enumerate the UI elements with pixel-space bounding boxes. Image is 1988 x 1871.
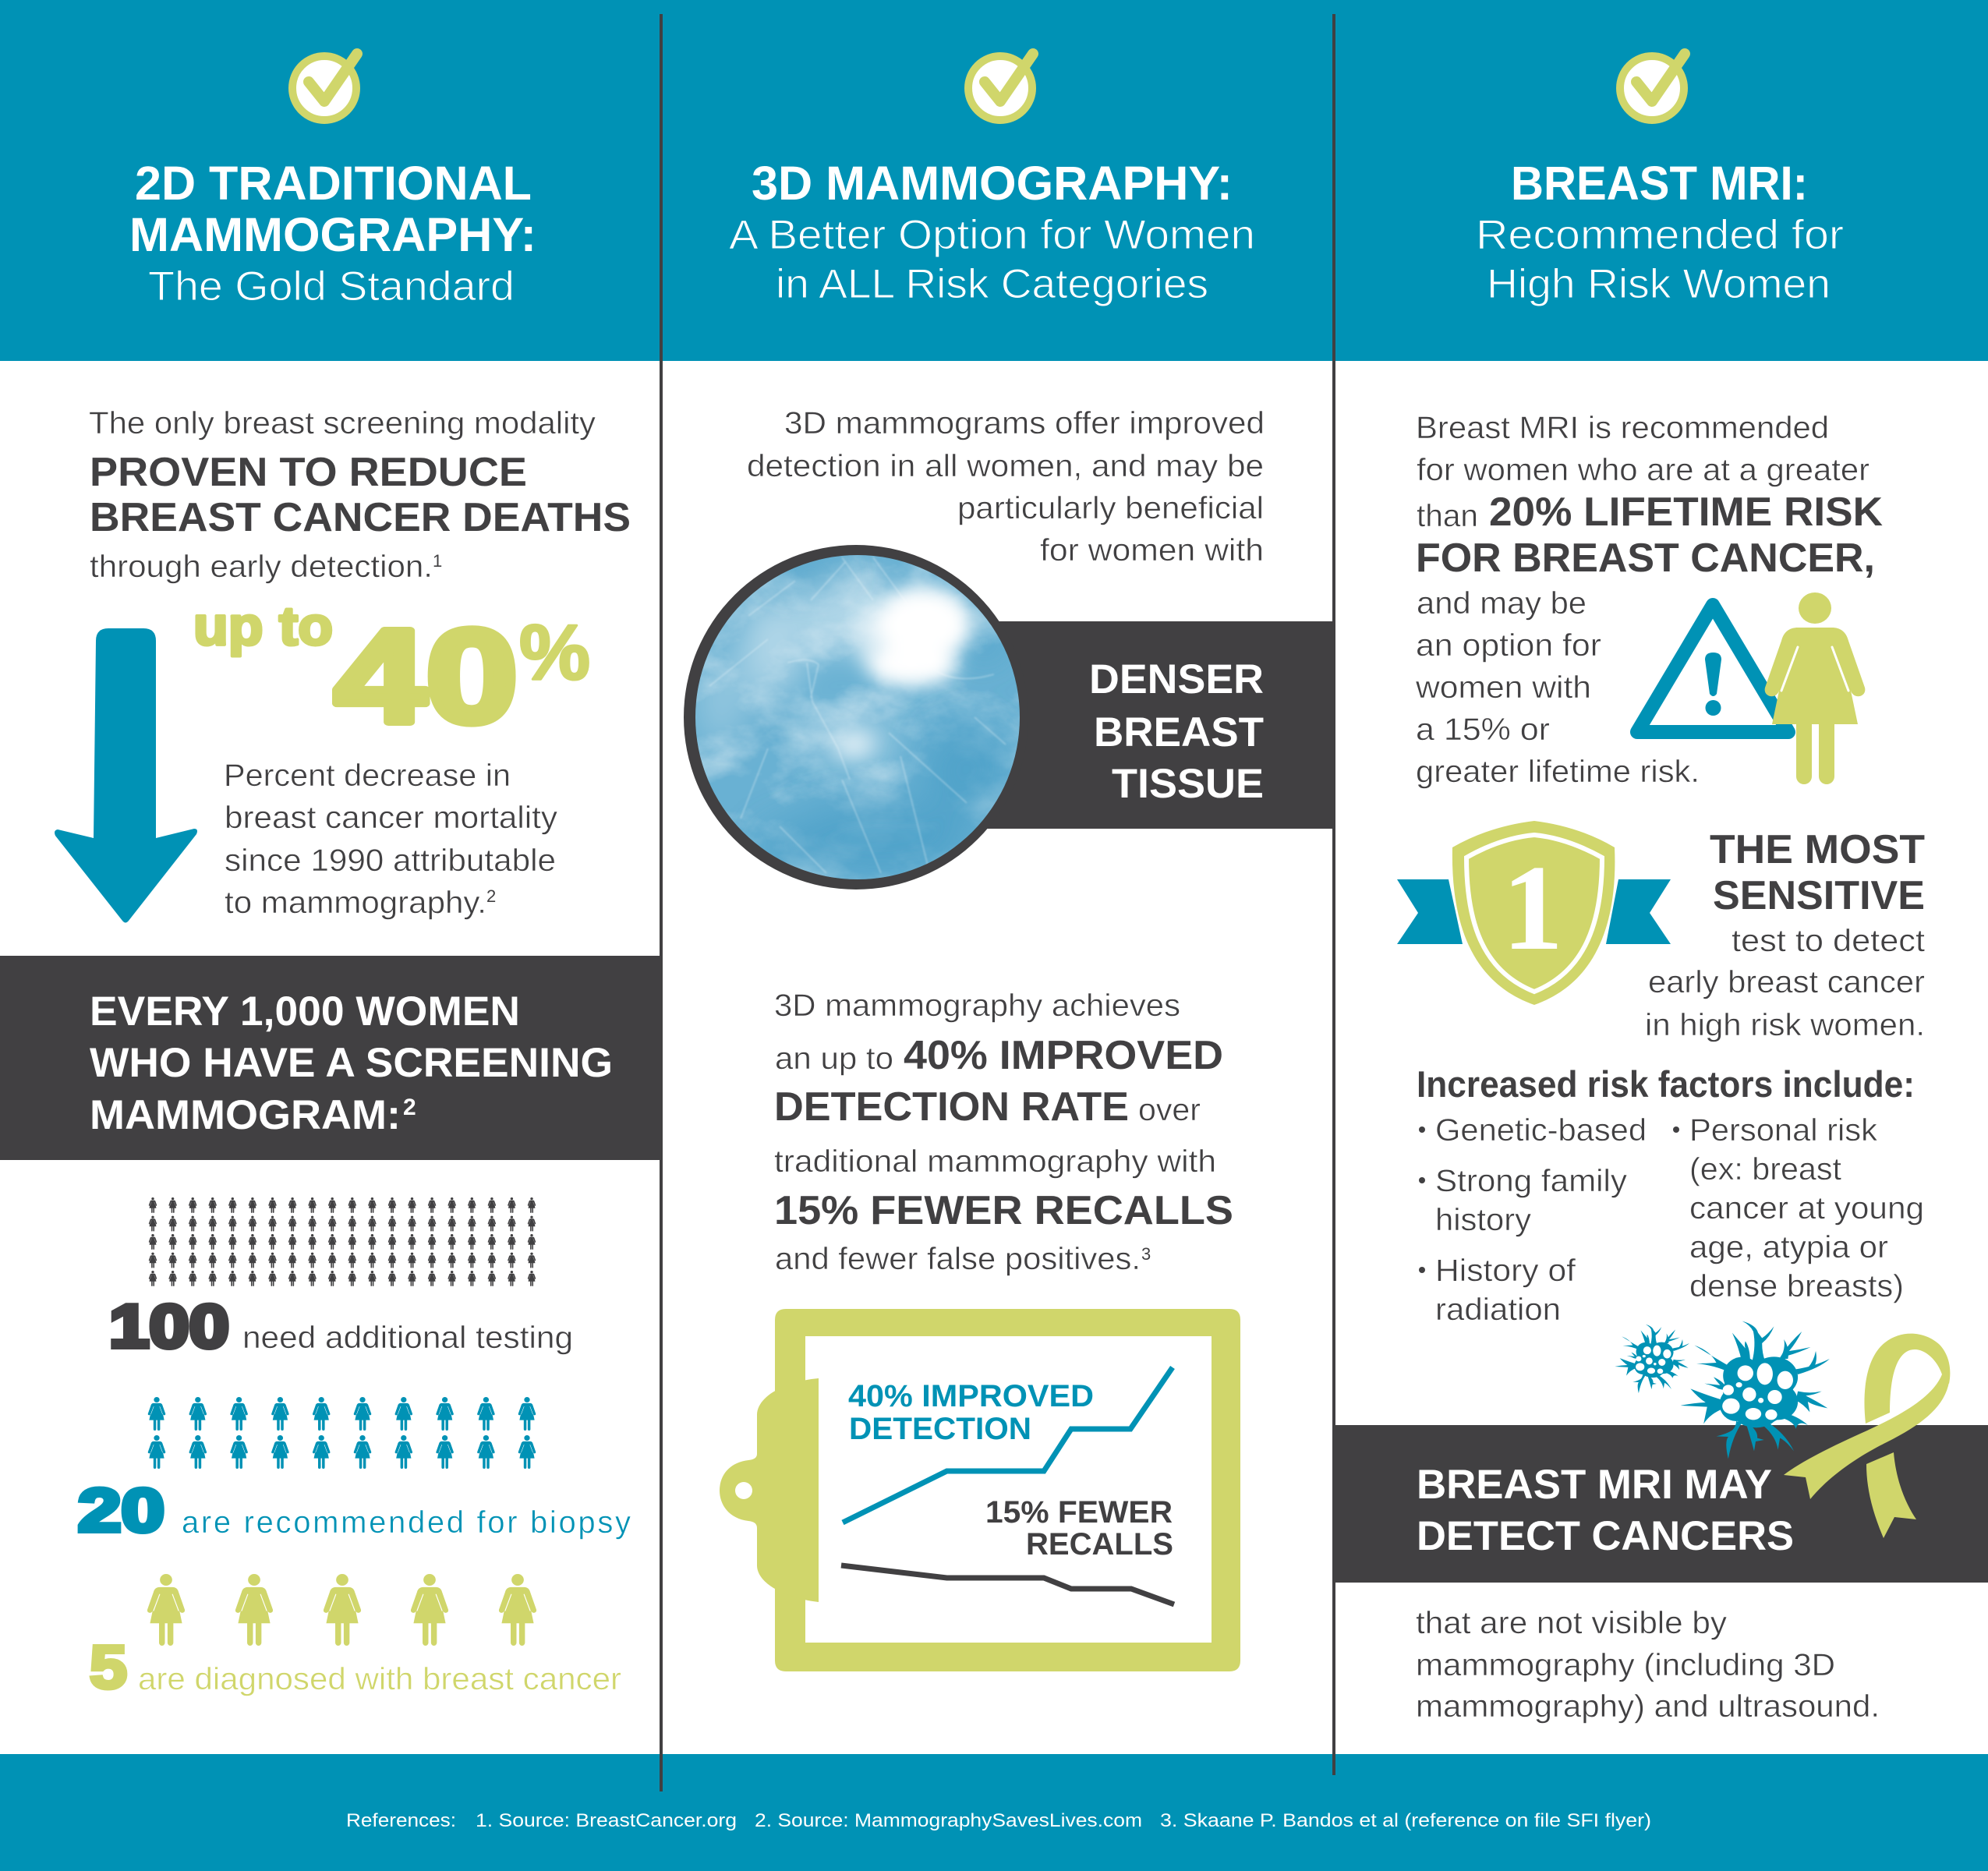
text: improved detection rate: 40% IMPROVED bbox=[904, 1033, 1223, 1078]
text: improved detection rate: 15% FEWER RECALLS bbox=[774, 1188, 1233, 1233]
text: the most sensitive bbox=[1645, 827, 1925, 1042]
heading: 3D mammography: in ALL Risk Categories bbox=[776, 261, 1208, 307]
text: percent decrease: Percent decrease in bbox=[224, 759, 511, 793]
text: not visible by mammography bbox=[1416, 1606, 1880, 1724]
line: fewer recalls bbox=[841, 1565, 1174, 1604]
text: percent decrease bbox=[224, 759, 557, 920]
divider: column one bbox=[660, 14, 663, 1791]
heading: breast MRI: BREAST MRI: bbox=[1511, 157, 1808, 210]
icon: check mark bbox=[968, 54, 1033, 120]
text: improved detection rate: traditional mammography with bbox=[774, 1144, 1216, 1179]
heading: 2D traditional mammography: MAMMOGRAPHY: bbox=[129, 208, 536, 261]
text: not visible by mammography: mammography) and ultrasound. bbox=[1416, 1689, 1880, 1724]
text: improved detection: for women with bbox=[1040, 533, 1264, 568]
text: improved detection rate: an up to bbox=[775, 1042, 893, 1076]
statistic: 20 recommended for biopsy: 20 bbox=[78, 1476, 164, 1544]
text: not visible by mammography: that are not visible by bbox=[1416, 1606, 1727, 1640]
banner: denser breast tissue: BREAST bbox=[1094, 709, 1264, 755]
text: lifetime risk: greater lifetime risk. bbox=[1416, 755, 1700, 789]
statistic: up to 40 percent: 40 bbox=[334, 603, 518, 751]
banner: breast MRI may detect cancers: BREAST MRI MAY bbox=[1417, 1462, 1772, 1508]
panel: 3D mammography bbox=[684, 54, 1334, 1671]
text: lifetime risk: than bbox=[1417, 499, 1478, 533]
text: proven to reduce deaths: BREAST CANCER DEATHS bbox=[90, 495, 631, 540]
banner: every 1,000 women: EVERY 1,000 WOMEN bbox=[90, 989, 520, 1035]
text: the most sensitive: SENSITIVE bbox=[1713, 873, 1925, 918]
text: the most sensitive: in high risk women. bbox=[1645, 1008, 1925, 1042]
text: improved detection: particularly beneficial bbox=[957, 491, 1264, 525]
heading: breast MRI bbox=[1476, 157, 1844, 307]
text: increased risk factors: age, atypia or bbox=[1689, 1230, 1888, 1264]
text: increased risk factors: history bbox=[1435, 1203, 1531, 1237]
divider: column two bbox=[1332, 14, 1335, 1775]
banner: breast MRI may detect cancers: DETECT CANCERS bbox=[1417, 1513, 1794, 1559]
chart: clipboard line chart bbox=[720, 1309, 1240, 1671]
statistic: 5 diagnosed with breast cancer bbox=[90, 1632, 621, 1701]
statistic: up to 40 percent: up to bbox=[193, 596, 333, 656]
heading: 2D traditional mammography bbox=[129, 157, 536, 309]
chart label: 15% fewer recalls bbox=[985, 1495, 1173, 1562]
heading: 2D traditional mammography: 2D TRADITIONAL bbox=[135, 157, 532, 210]
text: increased risk factors: radiation bbox=[1435, 1293, 1561, 1327]
header band bbox=[0, 0, 1988, 361]
text: improved detection rate: 3D mammography achieves bbox=[774, 989, 1180, 1023]
statistic: up to 40 percent bbox=[193, 596, 590, 751]
text: lifetime risk: and may be bbox=[1417, 586, 1587, 621]
text: increased risk factors: History of bbox=[1435, 1254, 1576, 1288]
references: 1. Source: BreastCancer.org bbox=[476, 1810, 737, 1831]
statistic: 100 need additional testing: 100 bbox=[109, 1292, 229, 1360]
heading: breast MRI: Recommended for bbox=[1476, 212, 1844, 258]
chart label: 40% improved detection: 40% IMPROVED bbox=[848, 1379, 1094, 1413]
statistic: 5 diagnosed with breast cancer: 5 bbox=[90, 1632, 127, 1701]
text: lifetime risk: FOR BREAST CANCER, bbox=[1416, 536, 1875, 581]
references: 3. Skaane P. Bandos et al (reference on file SFI flyer) bbox=[1160, 1810, 1651, 1831]
statistic: 100 need additional testing bbox=[109, 1292, 573, 1360]
statistic: 20 recommended for biopsy: are recommended for biopsy bbox=[182, 1505, 631, 1540]
text: increased risk factors: Increased risk factors include: bbox=[1417, 1063, 1915, 1105]
text: percent decrease: 2 bbox=[486, 886, 496, 906]
icon: check mark bbox=[292, 54, 357, 120]
banner: denser breast tissue: DENSER bbox=[1089, 656, 1264, 702]
text: the most sensitive: THE MOST bbox=[1710, 827, 1925, 872]
icon: number one shield with ribbon: 1 bbox=[1502, 840, 1563, 975]
banner: denser breast tissue: TISSUE bbox=[1112, 761, 1264, 807]
text: improved detection rate: DETECTION RATE bbox=[774, 1084, 1129, 1130]
text: increased risk factors: Strong family bbox=[1435, 1164, 1627, 1198]
text: proven to reduce deaths: through early detection. bbox=[90, 550, 433, 584]
text: percent decrease: breast cancer mortality bbox=[225, 801, 557, 835]
chart label: 15% fewer recalls: RECALLS bbox=[1026, 1527, 1173, 1562]
heading: 3D mammography bbox=[729, 157, 1255, 307]
text: proven to reduce deaths: PROVEN TO REDUCE bbox=[90, 450, 527, 495]
text: lifetime risk: women with bbox=[1415, 670, 1591, 705]
text: increased risk factors: Genetic-based bbox=[1435, 1113, 1647, 1148]
image: mammogram circle bbox=[684, 545, 1029, 890]
references bbox=[346, 1810, 1651, 1831]
heading: 2D traditional mammography: The Gold Standard bbox=[148, 263, 515, 309]
text: increased risk factors: (ex: breast bbox=[1689, 1152, 1841, 1187]
references: References: bbox=[346, 1810, 456, 1831]
text: lifetime risk: Breast MRI is recommended bbox=[1416, 411, 1829, 445]
text: percent decrease: since 1990 attributable bbox=[225, 844, 556, 878]
icon: small cancer cell bbox=[1615, 1325, 1689, 1393]
statistic: 5 diagnosed with breast cancer: are diagnosed with breast cancer bbox=[138, 1662, 621, 1696]
text: the most sensitive: test to detect bbox=[1732, 924, 1925, 958]
icon: woman bbox=[1765, 592, 1865, 784]
chart label: 40% improved detection: DETECTION bbox=[849, 1412, 1031, 1446]
text: lifetime risk: an option for bbox=[1416, 628, 1601, 663]
text: the most sensitive: early breast cancer bbox=[1648, 965, 1925, 999]
chart label: 40% improved detection bbox=[848, 1379, 1094, 1446]
text: percent decrease: to mammography. bbox=[225, 886, 486, 920]
text: lifetime risk: for women who are at a greater bbox=[1417, 453, 1869, 487]
heading: 3D mammography: A Better Option for Women bbox=[729, 212, 1255, 258]
footer band bbox=[0, 1754, 1988, 1871]
panel: 2D traditional mammography bbox=[0, 54, 661, 1701]
text: proven to reduce deaths bbox=[89, 406, 631, 584]
text: increased risk factors bbox=[1417, 1063, 1924, 1327]
statistic: 100 need additional testing: need additional testing bbox=[242, 1321, 573, 1355]
text: improved detection bbox=[747, 406, 1265, 568]
references: 2. Source: MammographySavesLives.com bbox=[755, 1810, 1142, 1831]
line: improved detection bbox=[843, 1367, 1173, 1523]
chart label: 15% fewer recalls: 15% FEWER bbox=[985, 1495, 1173, 1530]
icon grid: 100 women bbox=[149, 1197, 536, 1286]
icon: warning triangle bbox=[1637, 605, 1788, 732]
text: lifetime risk bbox=[1415, 411, 1883, 789]
icon: down arrow bbox=[55, 628, 197, 923]
banner: denser breast tissue bbox=[975, 621, 1334, 829]
text: improved detection rate: over bbox=[1138, 1093, 1201, 1127]
text: not visible by mammography: mammography (including 3D bbox=[1416, 1648, 1835, 1682]
banner: every 1,000 women: MAMMOGRAM: bbox=[90, 1092, 401, 1138]
text: lifetime risk: a 15% or bbox=[1416, 713, 1550, 747]
icon: check mark bbox=[1620, 54, 1685, 120]
statistic: 20 recommended for biopsy bbox=[78, 1476, 631, 1544]
banner: breast MRI may detect cancers bbox=[1334, 1425, 1988, 1583]
banner: every 1,000 women bbox=[0, 956, 661, 1160]
clipboard frame bbox=[775, 1309, 1240, 1671]
banner: every 1,000 women: WHO HAVE A SCREENING bbox=[90, 1040, 613, 1086]
heading: breast MRI: High Risk Women bbox=[1487, 261, 1831, 307]
icon: awareness ribbon bbox=[1784, 1334, 1950, 1538]
banner: every 1,000 women: 2 bbox=[403, 1095, 416, 1120]
text: improved detection rate bbox=[774, 989, 1233, 1276]
text: improved detection: detection in all women, and may be bbox=[747, 449, 1264, 483]
text: proven to reduce deaths: 1 bbox=[433, 551, 442, 571]
text: improved detection rate: 3 bbox=[1141, 1244, 1151, 1264]
heading: 3D mammography: 3D MAMMOGRAPHY: bbox=[752, 157, 1233, 210]
icon grid: 20 women bbox=[148, 1397, 536, 1469]
panel: breast MRI bbox=[1334, 54, 1988, 1724]
clipboard clip bbox=[720, 1378, 819, 1602]
text: lifetime risk: 20% LIFETIME RISK bbox=[1489, 490, 1883, 535]
text: increased risk factors: Personal risk bbox=[1689, 1113, 1878, 1148]
statistic: up to 40 percent: % bbox=[519, 609, 590, 696]
icon: large cancer cell bbox=[1681, 1321, 1830, 1459]
text: proven to reduce deaths: The only breast screening modality bbox=[89, 406, 596, 440]
text: improved detection: 3D mammograms offer improved bbox=[784, 406, 1265, 440]
icon row: 5 women bbox=[147, 1574, 536, 1646]
text: increased risk factors: dense breasts) bbox=[1689, 1269, 1904, 1303]
text: improved detection rate: and fewer false positives. bbox=[775, 1242, 1141, 1276]
icon: number one shield with ribbon bbox=[1397, 821, 1671, 1005]
text: increased risk factors: cancer at young bbox=[1689, 1191, 1924, 1226]
